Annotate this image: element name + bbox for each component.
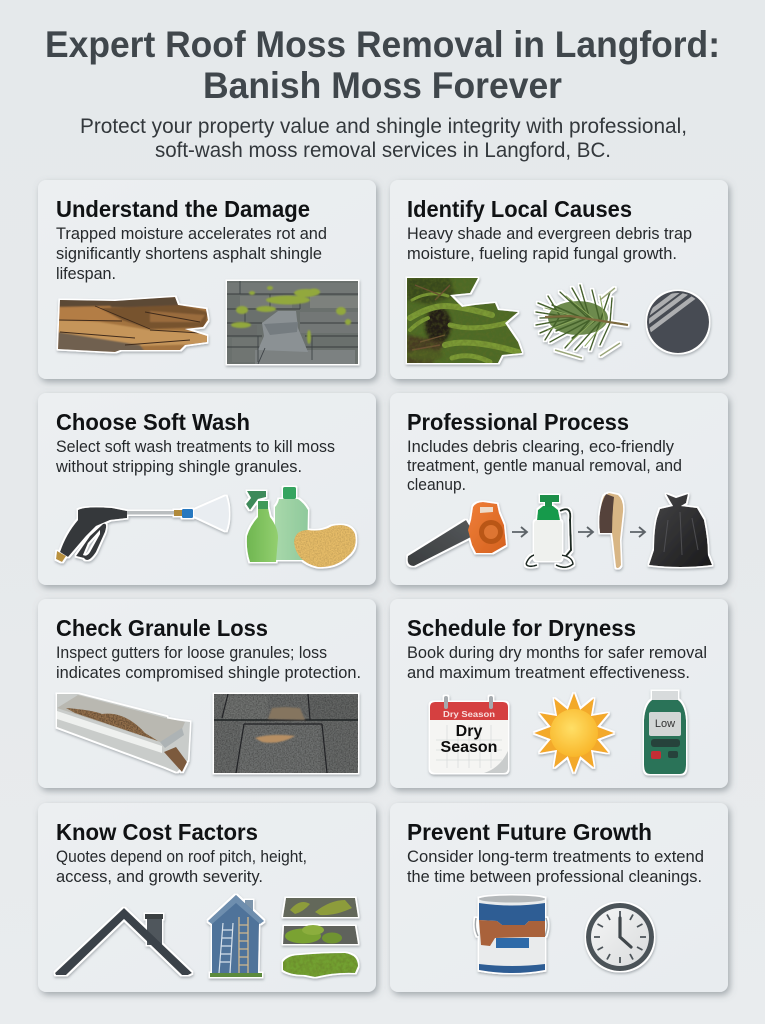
icon: pressure washer wand [56,496,229,562]
icon: shade circle [644,290,712,358]
heading: prevent future growth: Prevent Future Growth [407,819,652,845]
body text: causes: moisture, fueling rapid fungal growth. [407,245,677,263]
body text: dryness [407,644,707,682]
panel: understand the damage [38,180,376,379]
panel: identify local causes [390,180,728,379]
body text: granule loss [56,644,361,682]
icon: leaf blower [408,502,506,566]
panel: prevent future growth [390,803,728,992]
body text: prevention: Consider long-term treatments to extend [407,848,704,866]
panel: professional process [390,393,728,585]
heading: check granule loss: Check Granule Loss [56,615,268,641]
icon: treatment can [475,896,547,973]
body text: process [407,438,682,494]
arrow: blower to sprayer [512,527,527,537]
heading: professional process: Professional Process [407,409,629,435]
body text: prevention: the time between professional cleanings. [407,868,702,886]
photo: worn shingles [214,694,358,773]
icon: rotting wood [58,297,208,352]
heading: schedule for dryness: Schedule for Dryness [407,615,636,641]
subtitle: Protect your property value and shingle integrity with professional, [80,114,687,138]
heading: identify local causes: Identify Local Causes [407,196,632,222]
icon: pine sprig [536,285,628,358]
icon: moisture meter: Low [655,718,675,730]
subtitle: soft-wash moss removal services in Langford, BC. [155,138,611,162]
title: Banish Moss Forever [203,65,562,106]
body text: soft wash [55,438,335,476]
body text: soft wash: without stripping shingle granules. [55,458,302,476]
body text: granule loss: Inspect gutters for loose granules; loss [56,644,327,662]
arrow: brush to bag [630,527,645,537]
arrow: sprayer to brush [578,527,593,537]
body text: granule loss: indicates compromised shingle protection. [56,664,361,682]
body text: damage: Trapped moisture accelerates rot and [56,225,327,243]
icon: sun [534,693,614,773]
icon: dry season calendar: Dry Season [443,709,495,719]
icon: black garbage bag [649,494,712,567]
photo: evergreen branches [407,278,522,364]
title: Expert Roof Moss Removal in Langford: [45,24,720,65]
heading: know cost factors: Know Cost Factors [56,819,258,845]
body text: cost factors: access, and growth severity. [56,868,263,886]
panel: choose soft wash [38,393,376,585]
icon: wall clock [586,903,654,971]
icon: dry season calendar: Dry [456,723,482,740]
body text: process: cleanup. [407,476,466,494]
body text: dryness: and maximum treatment effectiveness. [407,664,690,682]
body text: causes [407,225,692,263]
icon: hand brush [599,493,623,568]
icon: pump sprayer [526,495,573,567]
body text: process: treatment, gentle manual removal, and [407,457,682,475]
icon: dry season calendar [430,696,508,773]
icon: roof pitch [55,908,192,975]
heading: choose soft wash: Choose Soft Wash [56,409,250,435]
photo: gutter with granules [57,694,190,772]
icon: green cleaning bottles [246,487,356,567]
body text: cost factors: Quotes depend on roof pitch, height, [56,848,307,866]
body text: cost factors [56,848,307,886]
panel: know cost factors [38,803,376,992]
body text: soft wash: Select soft wash treatments to kill moss [56,438,335,456]
subtitle [80,114,687,162]
title [45,24,720,106]
panel: check granule loss [38,599,376,788]
body text: damage [56,225,327,283]
heading: understand the damage: Understand the Damage [56,196,310,222]
icon: house with ladders [208,895,264,977]
body text: causes: Heavy shade and evergreen debris trap [407,225,692,243]
body text: prevention [407,848,704,886]
icon: dry season calendar: Season [441,739,497,756]
panel: schedule for dryness [390,599,728,788]
body text: dryness: Book during dry months for safer removal [407,644,707,662]
icon: moss severity levels [283,898,358,977]
body text: process: Includes debris clearing, eco-friendly [407,438,675,456]
body text: damage: significantly shortens asphalt shingle [56,245,322,263]
icon: moisture meter [644,691,686,774]
photo: mossy damaged shingles [227,281,358,364]
body text: damage: lifespan. [56,265,116,283]
